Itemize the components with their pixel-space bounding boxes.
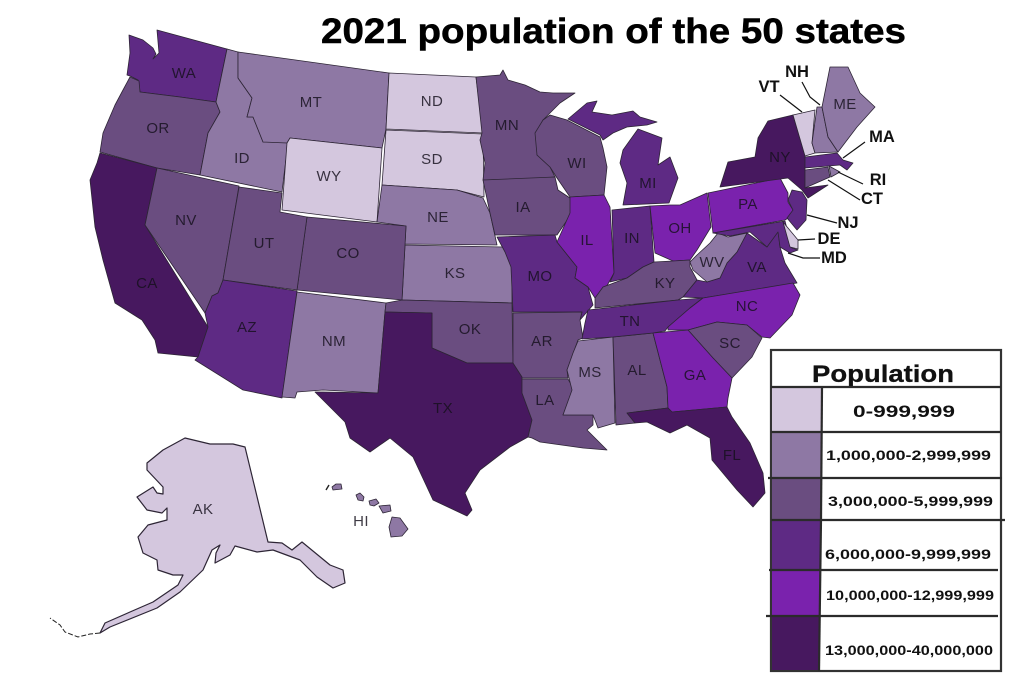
legend [766,350,1005,671]
callout labels for northeast states [758,63,895,267]
state: MO [497,235,593,320]
state: SC [688,322,762,378]
state: MS: MS [578,364,602,381]
state: NH [812,107,838,153]
state: AK: AK [193,501,213,518]
state: AL: AL [627,362,647,379]
callout: DE [798,230,840,248]
state: MS [563,337,615,428]
state: VA [683,230,797,298]
state: MD [713,221,798,253]
state: MN: MN [495,117,519,134]
callout: MA: MA [869,128,895,146]
state: AR: AR [531,333,553,350]
state: OK: OK [459,321,481,338]
state: IA [483,177,572,235]
state: UT [223,187,307,290]
state: KS [402,245,512,303]
state: ND: ND [421,93,443,110]
state: MN [476,70,575,180]
state: WY: WY [317,168,341,185]
swatch: 1,000,000-2,999,999 [772,433,822,477]
callout: NH: NH [785,63,809,81]
callout: VT [758,78,802,112]
state: NY [720,115,828,198]
callout: CT: CT [861,190,883,208]
state: KY: KY [655,275,675,292]
state: IN: IN [624,230,640,247]
legend label: 0-999,999: 0-999,999 [853,402,955,421]
state: NC: NC [736,298,758,315]
state: WA: WA [172,65,196,82]
swatch: 3,000,000-5,999,999 [772,479,822,520]
state: AK [100,438,345,633]
state: MO: MO [528,268,552,285]
state: HI: HI [353,513,369,530]
state: VA: VA [747,259,767,276]
swatch: 0-999,999 [772,388,822,431]
state: RI [829,166,840,177]
state: HI [332,484,408,537]
swatch: 10,000,000-12,999,999 [772,571,820,616]
state: PA [708,178,793,233]
state: TX: TX [433,400,453,417]
state: KY [595,260,697,308]
callout: NJ [807,214,859,232]
callout: DE: DE [818,230,840,248]
state: CO: CO [336,245,360,262]
state: NE: NE [427,209,449,226]
legend label: 1,000,000-2,999,999: 1,000,000-2,999,999 [826,447,991,463]
state: NM [282,292,386,398]
state: CO [297,217,406,300]
state: WI: WI [567,155,587,172]
callout: MA [843,128,895,158]
legend box [771,350,1001,671]
state: MT [238,52,389,148]
state: NE [377,185,497,245]
state: IA: IA [516,199,530,216]
callout: VT: VT [758,78,780,96]
state: ID [200,49,288,192]
state: DE [783,222,798,249]
state: LA: LA [535,392,555,409]
legend label: 10,000,000-12,999,999: 10,000,000-12,999,999 [826,587,994,603]
state: WV: WV [700,254,724,271]
state: AL [613,333,668,425]
state: SD: SD [421,151,443,168]
callout: NJ: NJ [837,214,859,232]
state: IN [610,206,654,282]
state: LA [522,379,607,450]
state: ME [822,67,875,152]
legend label: 6,000,000-9,999,999: 6,000,000-9,999,999 [825,546,991,562]
swatch: 6,000,000-9,999,999 [772,521,821,570]
state: AZ: AZ [237,319,257,336]
state: UT: UT [254,235,274,252]
callout: RI [838,171,886,189]
callout: RI: RI [870,171,886,189]
state: NC [668,283,800,338]
state: CT [805,167,830,188]
map: contiguous states [90,30,875,516]
state: ID: ID [234,150,250,167]
callout: CT [828,180,883,208]
state: WY [282,138,382,222]
state: MI lower [620,129,678,205]
state: IL [557,195,614,298]
state: NM: NM [322,333,346,350]
state: NJ [787,190,807,230]
state: ND [386,73,483,133]
callout: MD: MD [821,249,847,267]
state: WI [535,115,607,197]
state: FL [627,407,765,507]
state: FL: FL [723,447,741,464]
state: OR: OR [146,120,170,137]
swatch: 13,000,000-40,000,000 [772,617,819,670]
legend heading: Population [812,361,954,388]
state: TX [315,312,532,516]
state: MI upper [568,101,657,140]
state: OH [650,193,711,261]
state: SC: SC [719,335,741,352]
state: KS: KS [445,265,465,282]
state: MI lower: MI [639,175,657,192]
state: ME: ME [833,96,857,113]
callout: NH [785,63,820,105]
state: CA: CA [136,275,158,292]
Aleutian islands [50,618,100,637]
state: OR [100,77,220,175]
state: GA: GA [684,367,706,384]
callout: MD [788,249,847,267]
state: AR [513,312,583,378]
state: OH: OH [668,220,692,237]
state: TN [582,298,703,339]
state: MA [805,153,853,170]
state: CA [90,153,208,357]
state: NV [145,168,239,313]
state: TN: TN [620,313,640,330]
state: NV: NV [175,212,197,229]
state: SD [382,130,484,197]
state: IL: IL [580,232,594,249]
state: VT [793,110,815,156]
state: OK [385,300,513,363]
state: WV [690,233,747,282]
legend label: 3,000,000-5,999,999: 3,000,000-5,999,999 [828,493,993,509]
state: WA [127,30,227,102]
state: NY: NY [769,149,791,166]
legend label: 13,000,000-40,000,000: 13,000,000-40,000,000 [825,642,993,658]
state: PA: PA [738,196,758,213]
state: GA [653,330,732,412]
state: MT: MT [300,94,322,111]
state: AZ [195,280,297,398]
title: 2021 population of the 50 states [321,12,906,51]
